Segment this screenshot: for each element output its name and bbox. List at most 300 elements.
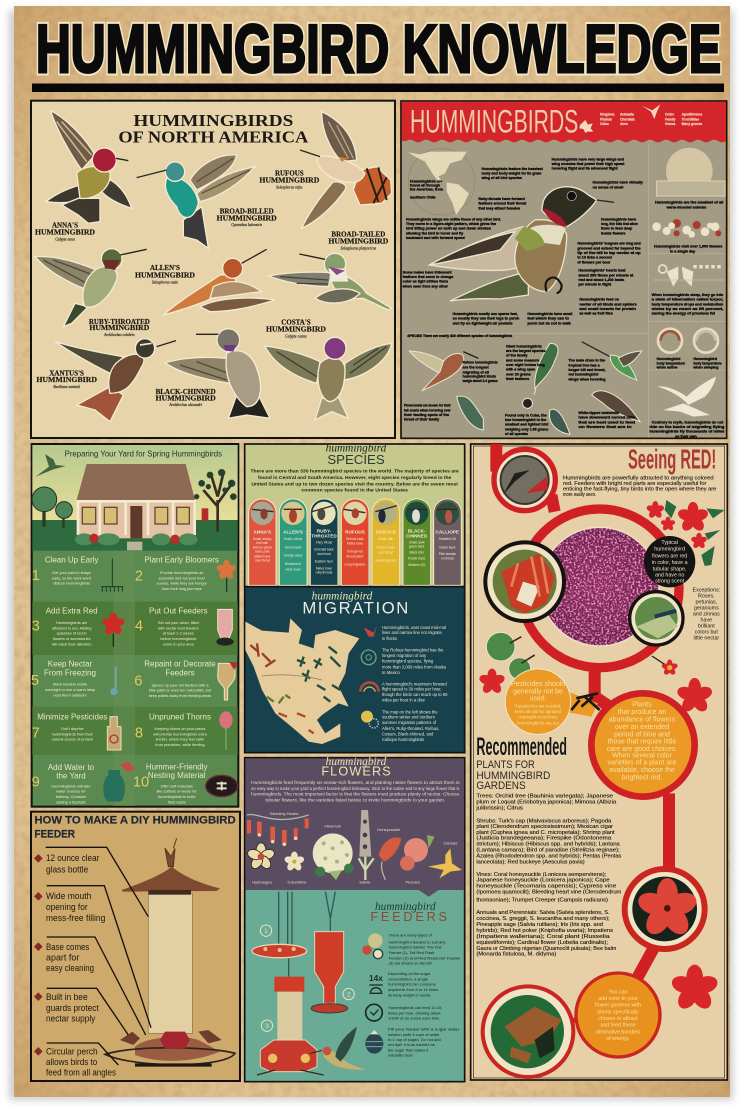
species cards: ALLEN'S [283,529,303,534]
species cards: west coast [286,568,301,572]
species intro: There are more than 330 hummingbird species in the world. The majority of species are [250,469,459,474]
infographic captions: smallest and lightest bird [505,423,548,427]
orange circle: plants: Plants [632,702,652,709]
feeder facts: hummingbird habitat. The Flat [389,944,442,949]
hydrangea [246,843,276,884]
red hibiscus photo [625,869,705,949]
step 4: Put Out Feeders [149,606,208,615]
plant list: thomsoniae); Trumpet Creeper (Campsis radicans) [476,898,608,904]
species cards: ruby throats [316,570,333,574]
grass [32,520,238,551]
species labels: Selasphorus rufus [276,186,303,190]
orange circle: attract: You can [608,989,628,995]
bird: Broad-billed [137,155,255,248]
species cards: Smallest US [439,537,456,541]
feeder facts: hummingbird feeders to suit any [389,939,445,944]
infographic captions: Hummingbirds have very large wings and [552,157,624,161]
infographic captions: When hummingbirds sleep, they go into [652,293,724,297]
feeder facts: 14x [369,973,383,983]
infographic captions: hummingbird kinds [463,375,496,379]
infographic captions: migrating of all [463,370,489,374]
bird: Ruby-throated [35,249,147,327]
heading: feeders: hummingbird [375,901,436,913]
orange circle: plants: available, choose the [609,767,675,774]
infographic captions: body temperature [693,362,722,366]
black circle fact: and have no [655,573,684,579]
species intro: United States and up to two dozen species visit the country. Below are the seven most [251,481,458,486]
orange circle: plants: varieties of a plant are [608,760,676,767]
infographic captions: hovering flight and its advanced flight [552,167,618,171]
large ring [520,509,679,668]
step 2: Provide hummingbirds an [160,571,203,575]
migration facts: in flocks [382,636,397,641]
species labels: XANTUS'S [49,369,84,377]
infographic captions: allowing the bird to hover and fly [406,231,464,235]
feeder list: apart for [46,952,79,962]
step 6: Feeders [165,668,195,677]
infographic captions: feet which they use to [527,317,570,321]
bird: Broad-tailed [268,253,392,310]
infographic captions: so mostly they use their legs to perch [453,317,519,321]
step 6 [134,660,238,700]
species cards: green back [409,544,425,548]
migration facts: longest migration of any [382,653,427,658]
species cards: Emerald back [314,548,334,552]
step 3: attracted to red. Adding [52,626,91,630]
species intro: found in Central and South America. However, eight species regularly breed in the [258,475,452,480]
infographic captions: red hummingbird [568,373,598,377]
step 10: 10 [133,775,149,791]
step 8: Unpruned Thorns [149,712,211,721]
orange circle: attract: diminutive bundles [596,1029,640,1035]
sky [32,445,238,520]
infographic captions: on their own [675,434,697,438]
infographic captions: on flowers that are in [578,425,632,429]
infographic captions: Found only in Cuba, the [505,413,547,417]
infographic captions: Hummingbirds have virtually [593,181,644,185]
species labels: HUMMINGBIRD [35,228,95,236]
step 3: Hummingbirds are [56,621,87,625]
step 2: 2 [135,569,143,585]
step 10 [133,762,238,804]
species cards: Desert species [375,559,397,563]
orange circle: plants: brightest red. [622,774,662,781]
plant list: plant (Cuphea ignea and C. micropetala); Shrimp plant [476,830,615,836]
viburnum: Viburnum [324,824,342,829]
step 8: will provide hummingbirds extra [153,732,208,736]
viburnum [313,824,353,880]
feeder list: allows birds to [46,1057,97,1067]
plant list: strictum); Hibiscus (Hibiscus spp. and hybrids); Lantana [476,842,620,848]
flower garland [652,219,721,238]
panel: preparing your yard [31,444,238,807]
species cards: Eastern hum [315,560,333,564]
step 4: come to your area [163,642,195,646]
infographic captions: that may attract females [478,206,520,210]
infographic captions: bird lifting power on both up and down strokes [406,227,491,231]
species cards: rose throat [255,558,270,562]
plant list: (Monarda fistulosa, M. didyma) [476,952,557,958]
infographic captions: of all species [505,432,528,436]
feeder 2: 2 [347,991,351,998]
feeder facts: (3) are shown on the left [389,960,433,965]
infographic captions: tall crests when hovering over [404,408,451,412]
migration facts: southern winter and northern [382,715,436,720]
panel: seeing red [471,443,727,1080]
bird: Black-chinned [165,329,270,418]
plant list: honeysuckle (Tecomaria capensis); Cypress vine [476,884,616,890]
feeder facts: anywhere from 6 to 14 times [388,987,438,992]
plant list: Japanese honeysuckle (Lonicera japonica); Cape [476,878,610,884]
feeder 1 [252,892,307,958]
orange circle: attract: flower gardens with [595,1003,641,1009]
step 1: Clean Up Early [45,556,99,565]
feeder list: Built in bee [46,992,88,1002]
plant list: (Impatiens walleriana); Coral plant (Russelia [476,934,610,940]
feeder facts [362,933,461,1058]
infographic captions: White-tipped sicklebills [578,411,619,415]
green plant photo [483,986,573,1077]
species cards: Long migration [345,562,366,566]
orange circle: plants [591,693,695,797]
feeder list: easy cleaning [46,963,94,973]
bleeding hearts: Bleeding Hearts [270,811,299,816]
heading: flowers [321,756,391,779]
orange circle: pesticides: If pesticides are needed, [514,703,562,708]
orange circle: pesticides [505,669,598,734]
step 8: shelter, where they feel safer [156,738,205,742]
species labels: HUMMINGBIRD [217,214,277,222]
species cards: Males have [254,554,271,558]
feeder 2 [311,892,354,1013]
black circle fact: hummingbird [654,547,685,553]
infographic captions: tip of the bill to lap nectar at up [577,251,642,255]
step 8: Keeping thorns on your plants [155,727,206,731]
infographic captions: Hummingbird [693,357,717,361]
step 6: little paint or even fun nail polish, but [149,689,212,693]
feeder list: nectar supply [46,1013,96,1023]
subheading: plants: GARDENS [476,780,526,792]
migration facts: more than 3,000 miles from Alaska [382,664,447,669]
orange circle: plants: those that require little [608,739,676,746]
step 6: Spruce up your old feeders with a [151,683,209,687]
exceptions note: petunias, [696,600,717,606]
orange circle: attract [576,973,660,1057]
step 9: Add Water to [48,763,95,772]
infographic captions: them to feed deep [601,227,633,231]
subheading: plants: PLANTS FOR [476,759,535,771]
step 3: flowers or accessories [53,637,91,641]
step 4: at least 1-2 weeks [163,632,194,636]
bird beak photo [630,592,683,645]
infographic captions: hummingbirds fly thousands of miles [649,430,724,434]
species cards: RUFOUS [345,529,365,534]
step 2 [135,556,237,592]
species cards [249,499,461,585]
plant list: hybrids); Red hot poker (Kniphofia uvaria); Impatiens [476,928,613,934]
migration facts: to Mexico [382,670,400,675]
nest illustration [657,148,725,196]
infographic captions: Hummingbirds feed on [579,298,619,302]
feeder facts: Fill your feeder with a sugar water [388,1027,460,1032]
infographic captions: grooved and extend far beyond the [577,246,641,250]
species cards: COSTA'S [376,529,396,534]
infographic captions: Hummingbirds have [601,217,636,221]
species labels: Selasphorus sasin [152,280,178,284]
feeder facts: There are many types of [389,933,433,938]
species labels: Selasphorus platycercus [341,246,377,250]
species labels [35,169,388,407]
columbine [284,852,307,884]
red header: Aves [620,122,628,126]
infographic captions: their feeding spots of the [404,413,449,417]
orange circle: plants: care are good choices. [607,746,677,753]
species labels: Archilochus alexandri [168,403,202,407]
heading: DIY feeder: FEEDER [34,828,75,840]
feeder facts: hummingbird can consume [388,982,437,987]
plant list: (Ipomoea quamoclit); Bleeding heart vine (Clerodendrum [476,890,622,896]
infographic captions: about 250 times per minute at [578,273,634,277]
infographic captions: saving the energy of precious fat [652,312,716,316]
migration facts: Calliope hummingbirds [382,737,424,742]
insect [571,693,600,710]
feeder facts: Feeder (1), Tall Red Flask [389,950,434,955]
species cards: BLACK- [408,528,426,533]
step 5: overnight or use a warm lamp [45,688,95,692]
step 7: 7 [32,725,40,741]
infographic captions: inside flowers [601,231,625,235]
infographic captions: longer bill and broad, [568,368,606,372]
step 1: disturb hummingbirds [53,582,90,586]
species labels: ALLEN'S [150,264,180,272]
red header: Phylum [600,117,612,121]
infographic captions: the Americas, from [410,187,444,191]
seeing red intro: red. Feeders with bright red parts are especially useful for [563,481,707,487]
feeder facts: Depending on the sugar [388,971,431,976]
red header: Order [665,113,675,117]
plant list: equisetiformis); Cardinal flower (Lobelia cardinalis); [476,940,608,946]
heading: species: SPECIES [327,452,385,467]
infographic captions: Hummingbirds' hearts beat [578,269,626,273]
plant list: coccinea, S. greggii, S. leucantha and many others); [476,916,610,922]
step 5: near them outdoors [53,693,87,697]
feeder illustration [105,838,235,1065]
infographic captions: southern Chile [410,195,436,199]
heading: North America: OF NORTH AMERICA [118,128,308,147]
subheading: plants [476,759,550,792]
species cards: Green back [285,545,302,549]
seeing red intro: more easily seen. [563,492,596,498]
species cards: Pink streaks [439,552,456,556]
orange circle: plants: over an extended [615,724,669,731]
migration facts: though the birds can reach up to 60 [382,692,448,697]
step 9: the Yard [56,772,86,781]
step 6: 6 [134,673,142,689]
infographic captions: Contrary to myth, hummingbirds do not [652,420,724,424]
species cards: Fiery throat [316,540,332,544]
bird: Allen's [163,249,275,315]
infographic captions: SPECIES There are nearly 330 different species of hummingbirds [407,334,512,338]
orange circle: pesticides: overnight or at times [518,715,558,720]
leaves [486,632,535,680]
bird: Costa's [265,337,392,420]
infographic captions: slows by as much as 95 percent, [652,307,723,311]
plant list: plum or Loquat (Eriobotrya japonica); Mimosa (Albizia [476,799,616,805]
step 1: early, so the work won't [52,576,92,580]
plant list: Trees: Orchid tree (Bauhinia variegata); Japanese [476,794,613,800]
infographic captions: ride on the backs of migrating flying [649,425,724,429]
species labels: BLACK-CHINNED [156,388,216,396]
infographic captions: Plovercrests are known for their [404,404,451,408]
infographic captions: and fly on lightweight air pockets [453,321,513,325]
step 5: From Freezing [44,668,96,677]
step 4: with nectar food feeders [158,626,199,630]
exceptions note [693,588,720,642]
icon: flying bird [36,454,66,477]
species labels: Calypte anna [55,237,75,241]
canna [428,840,462,878]
step 5: Keep Nectar [48,660,93,669]
step 9 [32,762,135,804]
bird: Xantus's [55,339,176,422]
infographic captions: found all through [410,183,440,187]
red connector lines [496,444,669,1020]
species cards: and head [317,552,331,556]
infographic captions [402,157,724,438]
species cards: THROATED [311,534,337,539]
infographic captions: when seen from any other [402,284,449,288]
infographic captions: and small insects for protein [579,307,636,311]
feeder facts: concentration, a single [388,976,429,981]
top eye circle [494,449,555,511]
infographic captions: body and body weight for its gram [482,171,542,175]
step 5: Move feeders inside [53,683,87,687]
infographic captions: Ruby-throats have forward [478,197,525,201]
wings icon [653,265,725,287]
migration facts: The Rufous hummingbird has the [382,648,444,653]
infographic captions: They move in a figure-eight pattern, which gives the [406,222,496,226]
white dove [657,377,716,417]
species cards: Males have [316,566,332,570]
black circle fact: tubular shape, [653,567,687,573]
plant list: Shrubs: Turk's cap (Malvaviscus arboreus); Pagoda [476,818,611,824]
species cards: Orange-red [347,550,363,554]
panel: DIY hummingbird feeder [31,812,240,1081]
infographic captions: of flowers per hour [577,260,611,264]
heading: migration: MIGRATION [302,598,408,617]
bird at feeder [310,1027,365,1070]
exceptions note: Roses, [698,594,715,600]
infographic captions: no sense of smell [593,185,623,189]
red header: Apodiformes [682,113,702,117]
top right flowers [646,500,725,566]
infographic captions: body temperature [657,362,685,366]
feeder list: guards protect [46,1003,99,1013]
standalone hibiscus [670,965,720,1012]
feeder list [34,853,116,1078]
orange circle: attract: add color to your [598,996,638,1002]
step 2: Plant Early Bloomers [144,556,219,565]
infographic captions: Hummingbirds are [410,179,442,183]
flowers intro: an easy way to make your yard a perfect hummingbird hideaway. Stick to the native and to any large flower that is [251,786,459,791]
step 7: natural source of protein [52,738,93,742]
step 8: 8 [135,725,143,741]
feeder facts: Feeder (2) and Red Reservoir Feeder [389,955,461,960]
species labels: COSTA'S [281,319,311,327]
step 9: adding a fountain [56,800,86,804]
step 6: keep paints away from feeding areas [149,694,211,698]
map: migrating birds [250,643,340,733]
feeder facts: 1/10th of an ounce each time [388,1016,440,1021]
orange circle: pesticides: Pesticides should [511,681,565,688]
step 9: 9 [32,775,40,791]
orange circle: plants: that produce an [618,709,666,716]
feeder facts: its body weight in nectar [388,993,431,998]
infographic captions: rest and about 1,200 beats [578,278,624,282]
infographic captions: over 20 grams [506,372,531,376]
orange circle: attract: plants specifically [597,1009,639,1015]
step 2: from their long journeys [162,587,202,591]
step 9: bathing. Consider [56,795,87,799]
plant list: (Lantana camara); Bird of paradise (Strelitzia reginae); [476,848,620,854]
feeder facts: naturally clear [388,1053,413,1058]
infographic captions: to 13 licks a second [577,256,612,260]
main ruby-throated bird [429,187,614,301]
orange circle: attract: and feed these [600,1023,636,1029]
plant list: Vines: Coral honeysuckle (Lonicera sempervirens); [476,872,606,878]
migration facts: lives and narrow line not migrate [382,630,443,635]
feeder facts: to 1 cup of sugar). Do not add [388,1037,441,1042]
heading: feeders: FEEDERS [370,910,447,924]
infographic captions: Hummingbirds' tongues are long and [577,242,641,246]
species birds [409,342,642,434]
infographic captions: Giant hummingbirds [506,344,542,348]
species labels: ANNA'S [52,222,78,230]
feeder list: opening for [46,902,88,912]
infographic captions: Hummingbird [657,357,680,361]
species cards: Purple band [408,556,425,560]
orange circle: pesticides: used. [529,696,547,703]
species labels: Basilinna xantusii [53,385,80,389]
step 4 [135,606,234,646]
feeder 3: 3 [265,1023,269,1030]
plant list: lanceolata); Red buckeye (Aesculus pavia) [476,859,585,865]
heading: recommended: Recommended [476,733,567,761]
infographic captions: forest of their family [404,418,440,422]
orange circle: attract: chosen to attract [598,1016,638,1022]
black circle fact: flowers are red [652,553,687,559]
species cards: on throat [441,556,454,560]
step 2: source, while they are hungry [157,582,207,586]
infographic captions: weigh about 3.4 grams [462,379,498,383]
infographic captions: Some males have iridescent [403,270,452,274]
exceptions note: have [701,618,712,624]
migration facts: flight speed is 30 miles per hour, [382,687,442,692]
step 7: Minimize Pesticides [37,712,107,721]
heading: North America: HUMMINGBIRDS [133,111,293,130]
infographic captions: Hummingbirds have small [527,312,572,316]
feeder facts: red dye! It is as harmful as [388,1042,435,1047]
red header: HUMMINGBIRDS [410,102,578,139]
salvia: Salvia [359,879,371,884]
step 3 [32,606,125,647]
red header: Genus [665,122,676,126]
seeing red intro: enticing the fast-flying, tiny birds into the open where they are [563,487,716,493]
species labels: HUMMINGBIRD [156,395,216,403]
heading: yard: Preparing Your Yard for Spring Hummingbirds [65,449,222,459]
species cards: Small, with [378,537,394,541]
heading: North America [118,111,308,147]
